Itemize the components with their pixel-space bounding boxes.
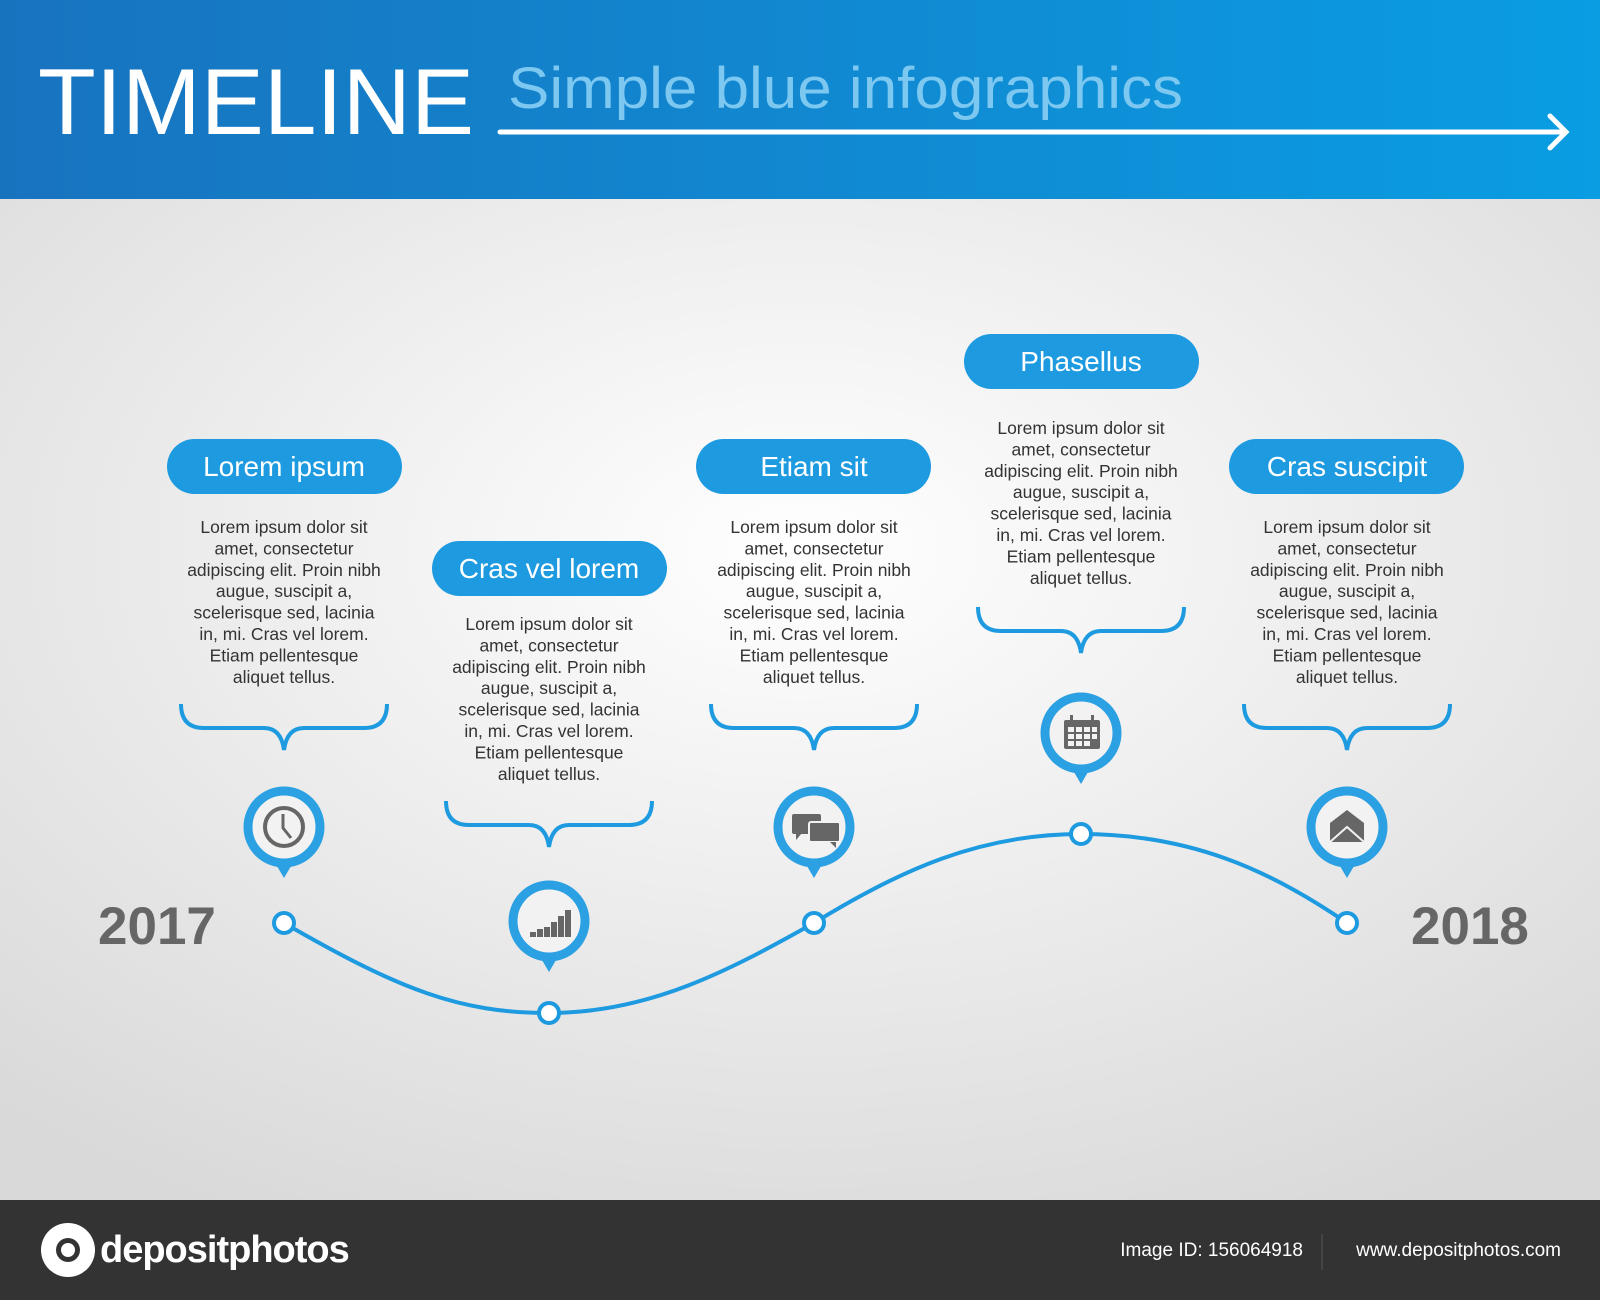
brace (446, 801, 652, 847)
icon pin: clock (248, 791, 320, 878)
header (0, 0, 1600, 199)
text block: adipiscing elit. Proin nibh (717, 560, 911, 580)
text block: aliquet tellus. (1296, 667, 1398, 687)
text block: in, mi. Cras vel lorem. (996, 525, 1166, 545)
text block: aliquet tellus. (763, 667, 865, 687)
text block: Lorem ipsum dolor sit (200, 517, 368, 537)
milestone 5 (1229, 439, 1464, 878)
icon pin: calendar (1045, 697, 1117, 784)
text block: augue, suscipit a, (481, 678, 617, 698)
subtitle: Simple blue infographics (508, 56, 1183, 121)
pill: Cras suscipit (1229, 439, 1464, 494)
text block: Lorem ipsum dolor sit (997, 418, 1165, 438)
milestone 3 (696, 439, 931, 878)
text block: adipiscing elit. Proin nibh (984, 461, 1178, 481)
text block: aliquet tellus. (233, 667, 335, 687)
text block: amet, consectetur (214, 538, 354, 558)
footer text: Image ID: 156064918 (1120, 1240, 1303, 1261)
text block: amet, consectetur (1011, 439, 1151, 459)
pill: Phasellus: Phasellus (1020, 346, 1142, 377)
nodes (274, 824, 1357, 1023)
text block: scelerisque sed, lacinia (194, 603, 375, 623)
text block: Lorem ipsum dolor sit (730, 517, 898, 537)
text block: in, mi. Cras vel lorem. (199, 624, 369, 644)
milestone 1 (167, 439, 402, 878)
text block: adipiscing elit. Proin nibh (452, 657, 646, 677)
text block: augue, suscipit a, (216, 581, 352, 601)
text block: Etiam pellentesque (1007, 546, 1155, 566)
text block: Lorem ipsum dolor sit (1263, 517, 1431, 537)
text block: in, mi. Cras vel lorem. (1262, 624, 1432, 644)
icon pin: chart (513, 885, 585, 972)
year 2017: 2017 (98, 897, 216, 956)
text block: augue, suscipit a, (1279, 581, 1415, 601)
pill: Cras vel lorem: Cras vel lorem (459, 553, 639, 584)
brace (181, 704, 387, 750)
text block: amet, consectetur (744, 538, 884, 558)
footer: www.depositphotos.com (1355, 1240, 1561, 1261)
text block: aliquet tellus. (1030, 568, 1132, 588)
milestone 4 (964, 334, 1199, 784)
text block: Etiam pellentesque (475, 742, 623, 762)
text block: augue, suscipit a, (746, 581, 882, 601)
text block: Lorem ipsum dolor sit (465, 614, 633, 634)
pill: Cras vel lorem (432, 541, 667, 596)
text block: scelerisque sed, lacinia (991, 504, 1172, 524)
text block: Etiam pellentesque (1273, 645, 1421, 665)
icon pin: envelope (1311, 791, 1383, 878)
pill: Phasellus (964, 334, 1199, 389)
timeline curve (284, 834, 1347, 1013)
text block: Etiam pellentesque (210, 645, 358, 665)
text block: scelerisque sed, lacinia (724, 603, 905, 623)
footer (0, 1200, 1600, 1300)
footer logo: depositphotos (100, 1229, 349, 1271)
text block: Etiam pellentesque (740, 645, 888, 665)
text block: amet, consectetur (1277, 538, 1417, 558)
text block: aliquet tellus. (498, 764, 600, 784)
brace (1244, 704, 1450, 750)
pill: Etiam sit: Etiam sit (760, 451, 868, 482)
text block: in, mi. Cras vel lorem. (729, 624, 899, 644)
pill: Etiam sit (696, 439, 931, 494)
text block: scelerisque sed, lacinia (1257, 603, 1438, 623)
text block: in, mi. Cras vel lorem. (464, 721, 634, 741)
pill: Lorem ipsum (167, 439, 402, 494)
pill: Cras suscipit: Cras suscipit (1267, 451, 1427, 482)
milestone 2 (432, 541, 667, 972)
pill: Lorem ipsum: Lorem ipsum (203, 451, 365, 482)
text block: augue, suscipit a, (1013, 482, 1149, 502)
text block: scelerisque sed, lacinia (459, 700, 640, 720)
brace (711, 704, 917, 750)
footer logo (41, 1223, 349, 1277)
icon pin: chat (778, 791, 850, 878)
text block: adipiscing elit. Proin nibh (1250, 560, 1444, 580)
year 2018: 2018 (1411, 897, 1529, 956)
title: TIMELINE (38, 49, 474, 154)
brace (978, 607, 1184, 653)
text block: adipiscing elit. Proin nibh (187, 560, 381, 580)
arrow (500, 116, 1566, 148)
text block: amet, consectetur (479, 635, 619, 655)
